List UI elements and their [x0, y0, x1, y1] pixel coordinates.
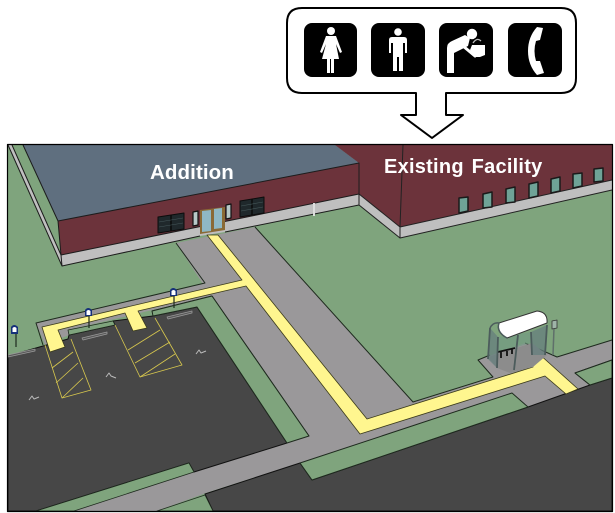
callout: accessible amenities	[287, 8, 576, 138]
site plan illustration	[8, 144, 612, 512]
accessible parking spaces with hatching	[45, 318, 182, 398]
row of existing facility windows	[459, 168, 603, 213]
shelter posts	[488, 325, 547, 370]
lawn background	[8, 145, 612, 511]
label: Existing Facility: Existing Facility	[384, 156, 543, 178]
accessible parking symbols	[29, 350, 206, 400]
callout bubble with arrow	[287, 8, 576, 138]
accessible route: yellow path	[42, 235, 578, 434]
addition building	[8, 145, 359, 266]
walkway edge lines	[36, 227, 612, 436]
bus stop sign	[553, 328, 554, 355]
entrance doors	[193, 204, 231, 234]
addition windows	[158, 197, 264, 233]
bus shelter	[488, 311, 557, 373]
bench	[498, 348, 515, 358]
grass strip beside parking lot	[152, 296, 309, 443]
road asphalt	[205, 378, 612, 511]
icon: drinking fountain	[439, 23, 493, 77]
lower left grass strips	[36, 463, 213, 511]
grass strip beside road	[300, 393, 528, 480]
shelter roof	[498, 311, 547, 338]
label: Addition: Addition	[150, 161, 234, 184]
wheel stops	[8, 311, 192, 357]
grass island	[68, 321, 115, 335]
icon: telephone	[508, 23, 562, 77]
frame	[8, 144, 612, 512]
sidewalks	[36, 227, 612, 511]
downspout	[313, 203, 315, 216]
shelter glass panels	[488, 325, 547, 368]
icon: men's restroom	[371, 23, 425, 77]
existing facility building	[335, 145, 612, 238]
shelter floor	[488, 343, 547, 373]
icon: women's restroom	[304, 23, 357, 77]
parking signs	[11, 288, 177, 347]
parking lot asphalt	[8, 307, 287, 511]
grass corner at right	[575, 360, 612, 385]
